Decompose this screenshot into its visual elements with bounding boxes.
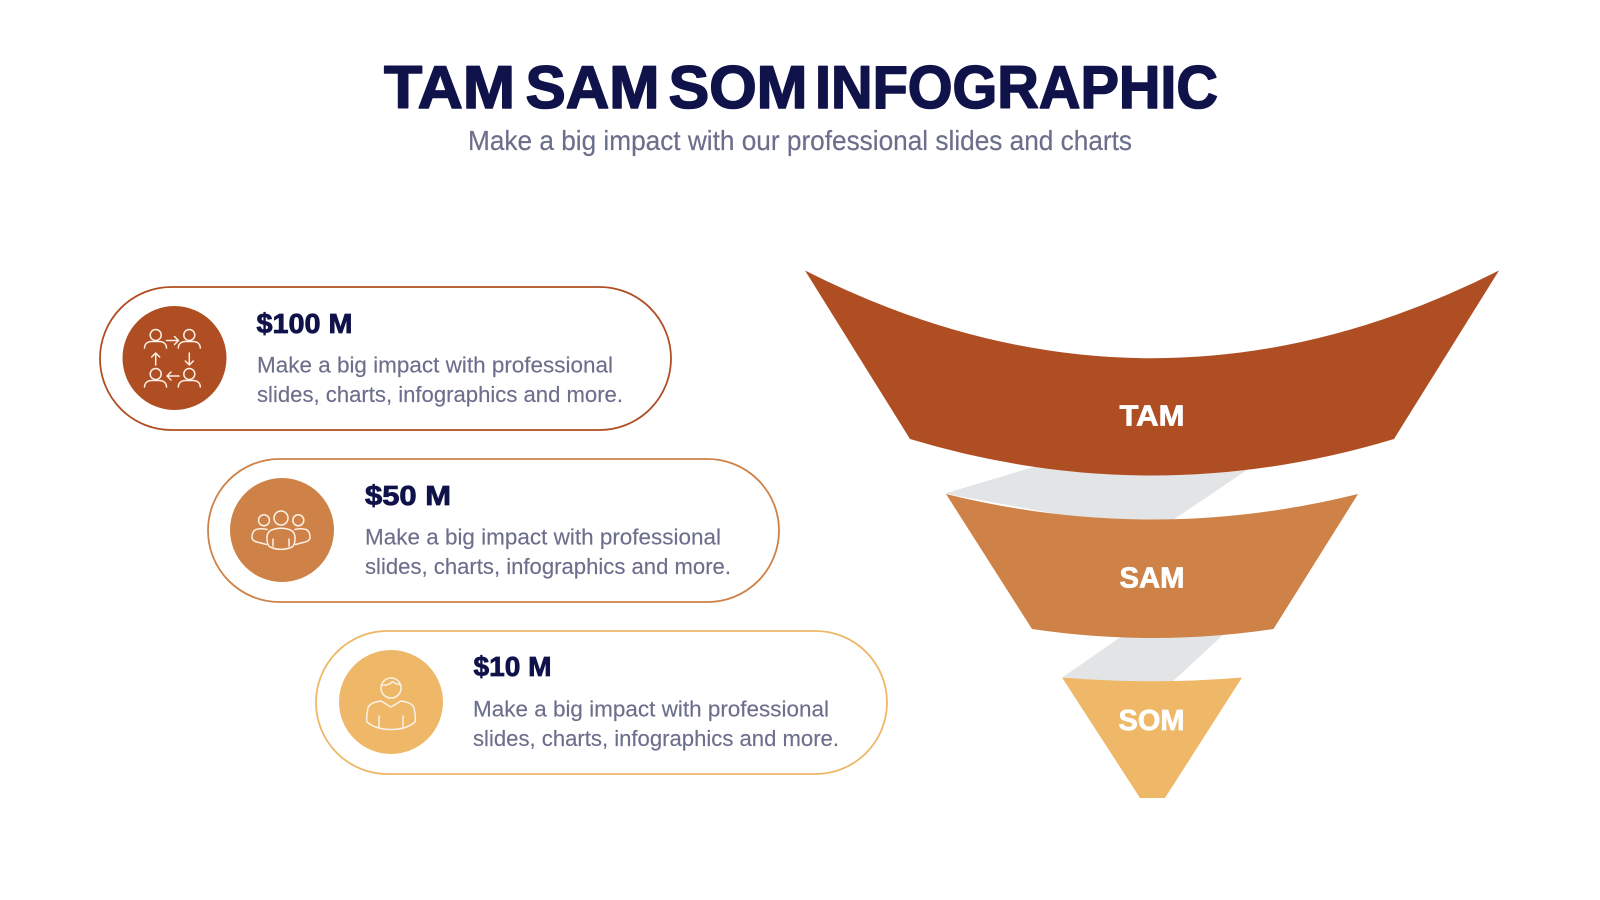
description bbox=[257, 352, 623, 407]
title: TAM bbox=[384, 54, 515, 121]
title: INFOGRAPHIC bbox=[815, 54, 1218, 121]
value: $100 M bbox=[256, 308, 352, 339]
icon: single person bbox=[339, 650, 443, 754]
value: $10 M bbox=[474, 651, 552, 682]
value: $50 M bbox=[365, 480, 451, 511]
title: SOM bbox=[668, 54, 808, 121]
funnel chart bbox=[805, 270, 1499, 798]
description: slides, charts, infographics and more. bbox=[365, 554, 731, 579]
panel: SOM card bbox=[316, 631, 887, 774]
subtitle: Make a big impact with our professional slides and charts bbox=[468, 125, 1132, 156]
card outline bbox=[208, 459, 779, 602]
card outline bbox=[316, 631, 887, 774]
description: slides, charts, infographics and more. bbox=[257, 382, 623, 407]
funnel tier: SAM bbox=[946, 494, 1358, 638]
title bbox=[384, 54, 1218, 121]
label: SOM: SOM bbox=[1118, 705, 1184, 737]
icon: people exchange bbox=[122, 306, 226, 410]
panel: SAM card bbox=[208, 459, 779, 602]
label: SAM: SAM bbox=[1120, 562, 1184, 594]
connector: TAM to SAM bbox=[945, 466, 1247, 522]
description: slides, charts, infographics and more. bbox=[473, 726, 839, 751]
description bbox=[365, 524, 731, 579]
description: Make a big impact with professional bbox=[365, 524, 721, 550]
description: Make a big impact with professional bbox=[473, 696, 829, 722]
description: Make a big impact with professional bbox=[257, 352, 613, 378]
title: SAM bbox=[526, 54, 660, 121]
connector: SAM to SOM bbox=[1063, 634, 1224, 684]
description bbox=[473, 696, 839, 751]
panel: TAM card bbox=[100, 287, 671, 430]
label: TAM: TAM bbox=[1120, 400, 1184, 432]
card outline bbox=[100, 287, 671, 430]
funnel tier: SOM bbox=[1062, 678, 1242, 798]
funnel tier: TAM bbox=[805, 270, 1499, 476]
icon: group of people bbox=[230, 478, 334, 582]
